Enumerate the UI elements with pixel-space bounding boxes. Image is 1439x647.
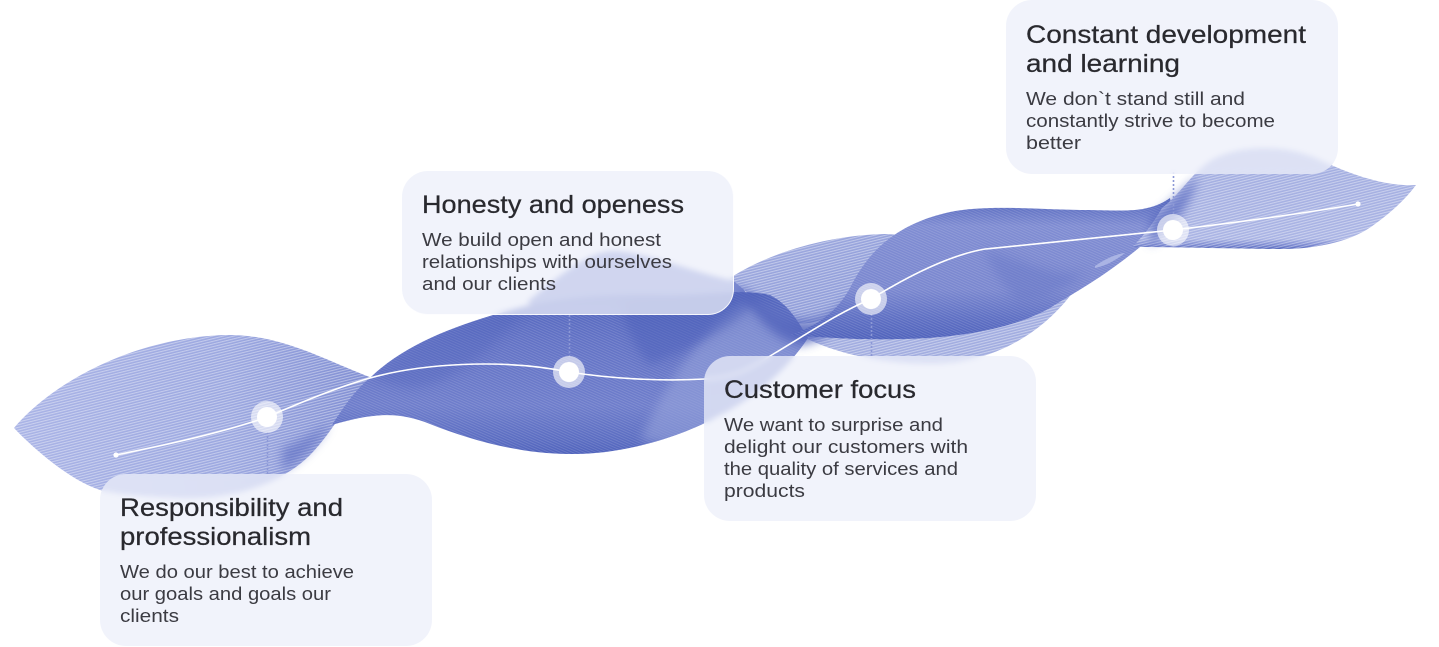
white timeline line — [116, 204, 1358, 455]
wave ribbon chart with timeline — [14, 148, 1416, 499]
milestone marker 3 — [855, 283, 887, 315]
right light tail of ribbon — [1132, 148, 1416, 249]
text block — [1026, 89, 1275, 153]
heading — [1026, 21, 1306, 78]
lower light lobe under customer card — [800, 296, 1070, 364]
milestone marker 2 — [553, 356, 585, 388]
dotted connector lines — [268, 172, 1174, 475]
heading: Responsibility and — [120, 494, 343, 522]
timeline end dot — [1355, 201, 1361, 207]
heading: Constant development — [1026, 21, 1306, 49]
text block: relationships with ourselves — [422, 252, 672, 272]
text block: We want to surprise and — [724, 415, 943, 435]
text block — [422, 230, 672, 294]
panel: honesty and openess — [402, 171, 734, 315]
dark crossing ridge — [733, 285, 852, 345]
heading: Honesty and openess — [422, 191, 684, 219]
panel: constant development and learning — [1006, 0, 1338, 174]
heading: Customer focus — [724, 376, 916, 404]
text block — [120, 562, 354, 626]
text block: We do our best to achieve — [120, 562, 354, 582]
heading: professionalism — [120, 523, 311, 551]
text block: our goals and goals our — [120, 584, 331, 604]
main dark ribbon band — [332, 292, 810, 454]
text block: constantly strive to become — [1026, 111, 1275, 131]
text block: the quality of services and — [724, 459, 958, 479]
text block: and our clients — [422, 274, 556, 294]
left light lobe of ribbon — [14, 335, 372, 498]
text block: clients — [120, 606, 179, 626]
heading: and learning — [1026, 50, 1180, 78]
panel: responsibility and professionalism — [100, 474, 432, 646]
heading — [120, 494, 343, 551]
text block: products — [724, 481, 805, 501]
text block: We don`t stand still and — [1026, 89, 1245, 109]
middle light lobe — [730, 234, 908, 324]
milestone marker 4 — [1157, 214, 1189, 246]
text block — [724, 415, 968, 501]
panel: customer focus — [704, 356, 1036, 521]
milestone marker 1 — [251, 401, 283, 433]
text block: better — [1026, 133, 1081, 153]
timeline start dot — [113, 452, 119, 458]
text block: delight our customers with — [724, 437, 968, 457]
hidden upper lobe behind honesty card — [527, 251, 760, 320]
upper right bulge of ribbon — [790, 198, 1176, 339]
text block: We build open and honest — [422, 230, 661, 250]
